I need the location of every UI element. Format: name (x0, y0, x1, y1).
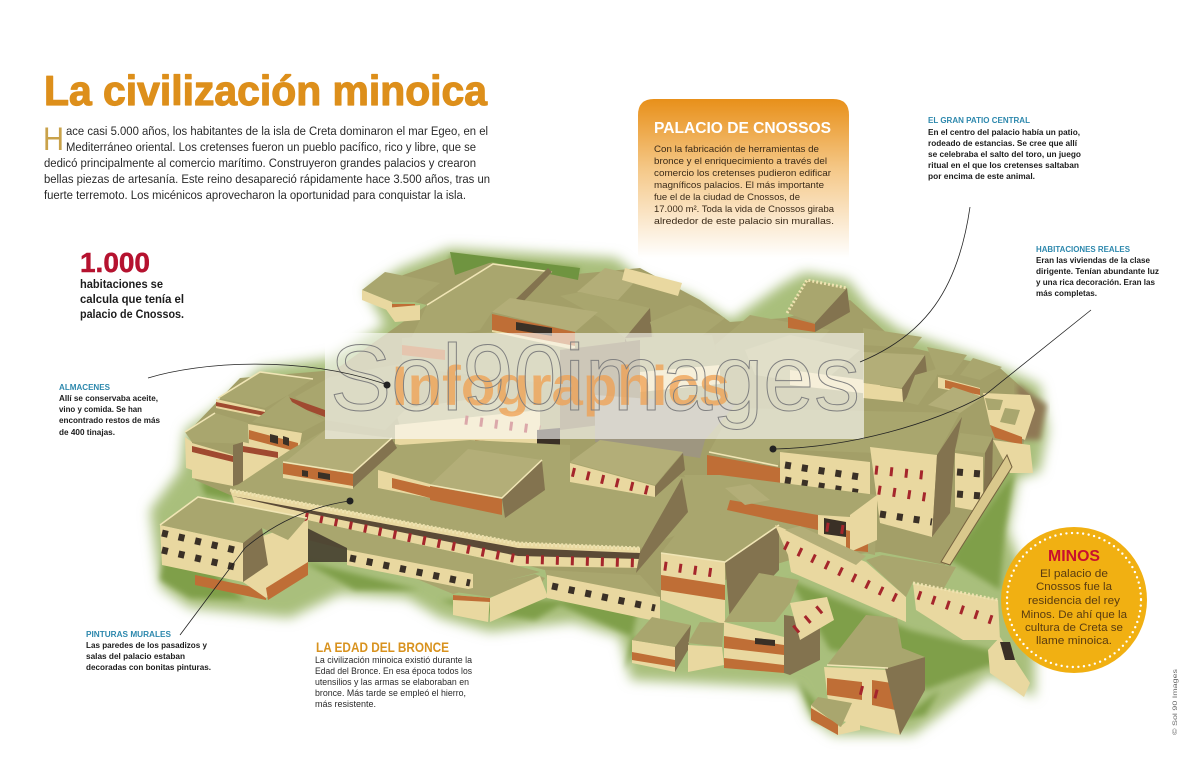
callout: habitaciones reales: Eran las viviendas de la clase (1036, 255, 1150, 265)
south-central block (724, 573, 834, 675)
callout: el gran patio central: En el centro del palacio había un patio, (928, 127, 1080, 137)
gallery south-east (545, 570, 660, 622)
callout circle: minos: llame minoica. (1036, 635, 1112, 647)
callout circle: minos: Minos. De ahí que la (1021, 609, 1128, 621)
callout: habitaciones reales: más completas. (1036, 288, 1097, 298)
royal rooms multi-storey (870, 417, 962, 537)
panel: palacio de Cnossos: comercio los cretenses pudieron edificar (654, 167, 831, 178)
south-centre tower (661, 510, 779, 625)
main terrace (230, 430, 880, 548)
north-centre roofs (560, 268, 725, 360)
north-west cross block (362, 272, 440, 322)
colonnade block (570, 440, 685, 497)
callout: habitaciones reales (1036, 244, 1159, 298)
panel: palacio de Cnossos: Con la fabricación de herramientas de (654, 143, 819, 154)
royal rooms east wing (955, 433, 993, 513)
south-east small block (811, 697, 860, 735)
lower gallery (307, 520, 540, 594)
east wall (941, 455, 1012, 565)
intro text block: bellas piezas de artesanía. Este reino desapareció rápidamente hace 3.500 años, tras un (44, 172, 490, 186)
callout: almacenes (59, 382, 160, 437)
drop cap: H (43, 121, 64, 157)
panel: palacio de Cnossos: bronce y el enriquecimiento a través del (654, 155, 827, 166)
north-east complex (983, 383, 1047, 473)
text block: la edad del bronce: bronce. Más tarde se empleó el hierro, (315, 688, 466, 698)
leader lines (148, 207, 1091, 635)
title: La civilización minoica (44, 67, 488, 114)
panel: palacio de Cnossos: 17.000 m². Toda la vida de Cnossos giraba (654, 203, 835, 214)
courtyard block (378, 452, 460, 498)
text block: la edad del bronce: La civilización minoica existió durante la (315, 655, 472, 665)
panel: palacio de Cnossos: fue el de la ciudad de Cnossos, de (654, 191, 800, 202)
north-east terrace rows (863, 328, 1002, 413)
callout: almacenes: encontrado restos de más (59, 415, 160, 425)
callout circle: minos: residencia del rey (1028, 595, 1121, 607)
callout circle: minos: MINOS (1048, 548, 1100, 565)
text block: la edad del bronce: utensilios y las armas se elaboraban en (315, 677, 469, 687)
watermark: Infographics (392, 354, 730, 417)
royal rooms facade west (780, 452, 870, 510)
panel: palacio de Cnossos: magníficos palacios. El más importante (654, 179, 824, 190)
upper block with orange band (492, 298, 598, 352)
south stair (988, 637, 1030, 697)
terrace block east (430, 449, 545, 518)
callout: habitaciones reales: HABITACIONES REALES (1036, 244, 1130, 254)
south terrace (684, 475, 877, 555)
south porch (453, 574, 548, 622)
text block: la edad del bronce: LA EDAD DEL BRONCE (316, 639, 449, 655)
east terraces under watermark (715, 315, 880, 395)
callout circle: minos: El palacio de (1040, 568, 1108, 580)
north roof (408, 264, 552, 345)
west block lower (185, 413, 252, 486)
callout: almacenes: ALMACENES (59, 382, 110, 392)
stepped gallery west (775, 525, 906, 622)
callout circle: minos: Cnossos fue la (1036, 581, 1113, 593)
palace illustration (150, 248, 1048, 735)
stat: 1.000 rooms: 1.000 (80, 247, 150, 278)
panel: palacio de Cnossos (638, 99, 849, 258)
panel: palacio de Cnossos: alrededor de este palacio sin murallas. (654, 215, 834, 226)
west block middle (243, 395, 325, 484)
stat: 1.000 rooms: habitaciones se (80, 279, 163, 291)
green court (450, 252, 580, 280)
west block upper (216, 372, 313, 418)
text block: la edad del bronce: Edad del Bronce. En esa época todos los (315, 666, 473, 676)
stat: 1.000 rooms: calcula que tenía el (80, 294, 184, 306)
central courtyard (595, 395, 735, 458)
stat: 1.000 rooms (80, 247, 184, 321)
callout: pinturas murales: decoradas con bonitas pinturas. (86, 662, 211, 672)
callout: habitaciones reales: y una rica decoración. Eran las (1036, 277, 1155, 287)
south colonnade (230, 490, 640, 568)
green ground patches (160, 255, 1020, 722)
ground halo (150, 248, 1048, 735)
callout circle: minos: cultura de Creta se (1025, 622, 1123, 634)
panel: palacio de Cnossos: PALACIO DE CNOSSOS (654, 120, 831, 137)
credit: © Sol 90 Images (1172, 669, 1179, 735)
callout: pinturas murales: PINTURAS MURALES (86, 629, 171, 639)
callout circle: minos (1001, 527, 1147, 673)
stepped gallery east (913, 583, 1000, 640)
intro text block: Mediterráneo oriental. Los cretenses fueron un pueblo pacífico, rico y libre, que se (66, 140, 476, 154)
east block roof (707, 408, 960, 488)
callout: el gran patio central: ritual en el que los cretenses saltaban (928, 160, 1079, 170)
terrace block west (283, 430, 397, 489)
text block: la edad del bronce: más resistente. (315, 699, 376, 709)
west-central hall (395, 398, 560, 470)
diagonal wall (636, 478, 688, 573)
south-west block (160, 497, 308, 600)
intro text block: dedicó principalmente al comercio marítimo. Construyeron grandes palacios y crearon (44, 156, 476, 170)
callout: pinturas murales: salas del palacio estaban (86, 651, 185, 661)
south-west small block (632, 617, 724, 672)
callout: almacenes: Allí se conservaba aceite, (59, 393, 158, 403)
callout: el gran patio central: rodeado de estancias. Se cree que allí (928, 138, 1078, 148)
callout: almacenes: de 400 tinajas. (59, 427, 115, 437)
south-east block (824, 615, 925, 735)
watermark: Sol90images (330, 325, 860, 430)
callout: habitaciones reales: dirigente. Tenían abundante luz (1036, 266, 1159, 276)
west block rear (288, 360, 420, 430)
callout: el gran patio central: se celebraba el salto del toro, un juego (928, 149, 1081, 159)
gallery roof (866, 555, 956, 597)
callout: pinturas murales: Las paredes de los pasadizos y (86, 640, 207, 650)
palace base (190, 258, 1030, 600)
north-east tower (787, 280, 850, 332)
callout: pinturas murales (86, 629, 211, 672)
central halls (402, 332, 720, 430)
callout: almacenes: vino y comida. Se han (59, 404, 142, 414)
intro text block: ace casi 5.000 años, los habitantes de la isla de Creta dominaron el mar Egeo, en el (66, 124, 488, 138)
intro text block: fuerte terremoto. Los micénicos aprovecharon la oportunidad para conquistar la isla. (44, 188, 466, 202)
intro text block (43, 121, 490, 202)
text block: la edad del bronce (315, 639, 473, 709)
callout: el gran patio central: EL GRAN PATIO CENTRAL (928, 115, 1030, 125)
callout: el gran patio central (928, 115, 1081, 181)
callout: el gran patio central: por encima de este animal. (928, 171, 1035, 181)
stat: 1.000 rooms: palacio de Cnossos. (80, 309, 184, 321)
